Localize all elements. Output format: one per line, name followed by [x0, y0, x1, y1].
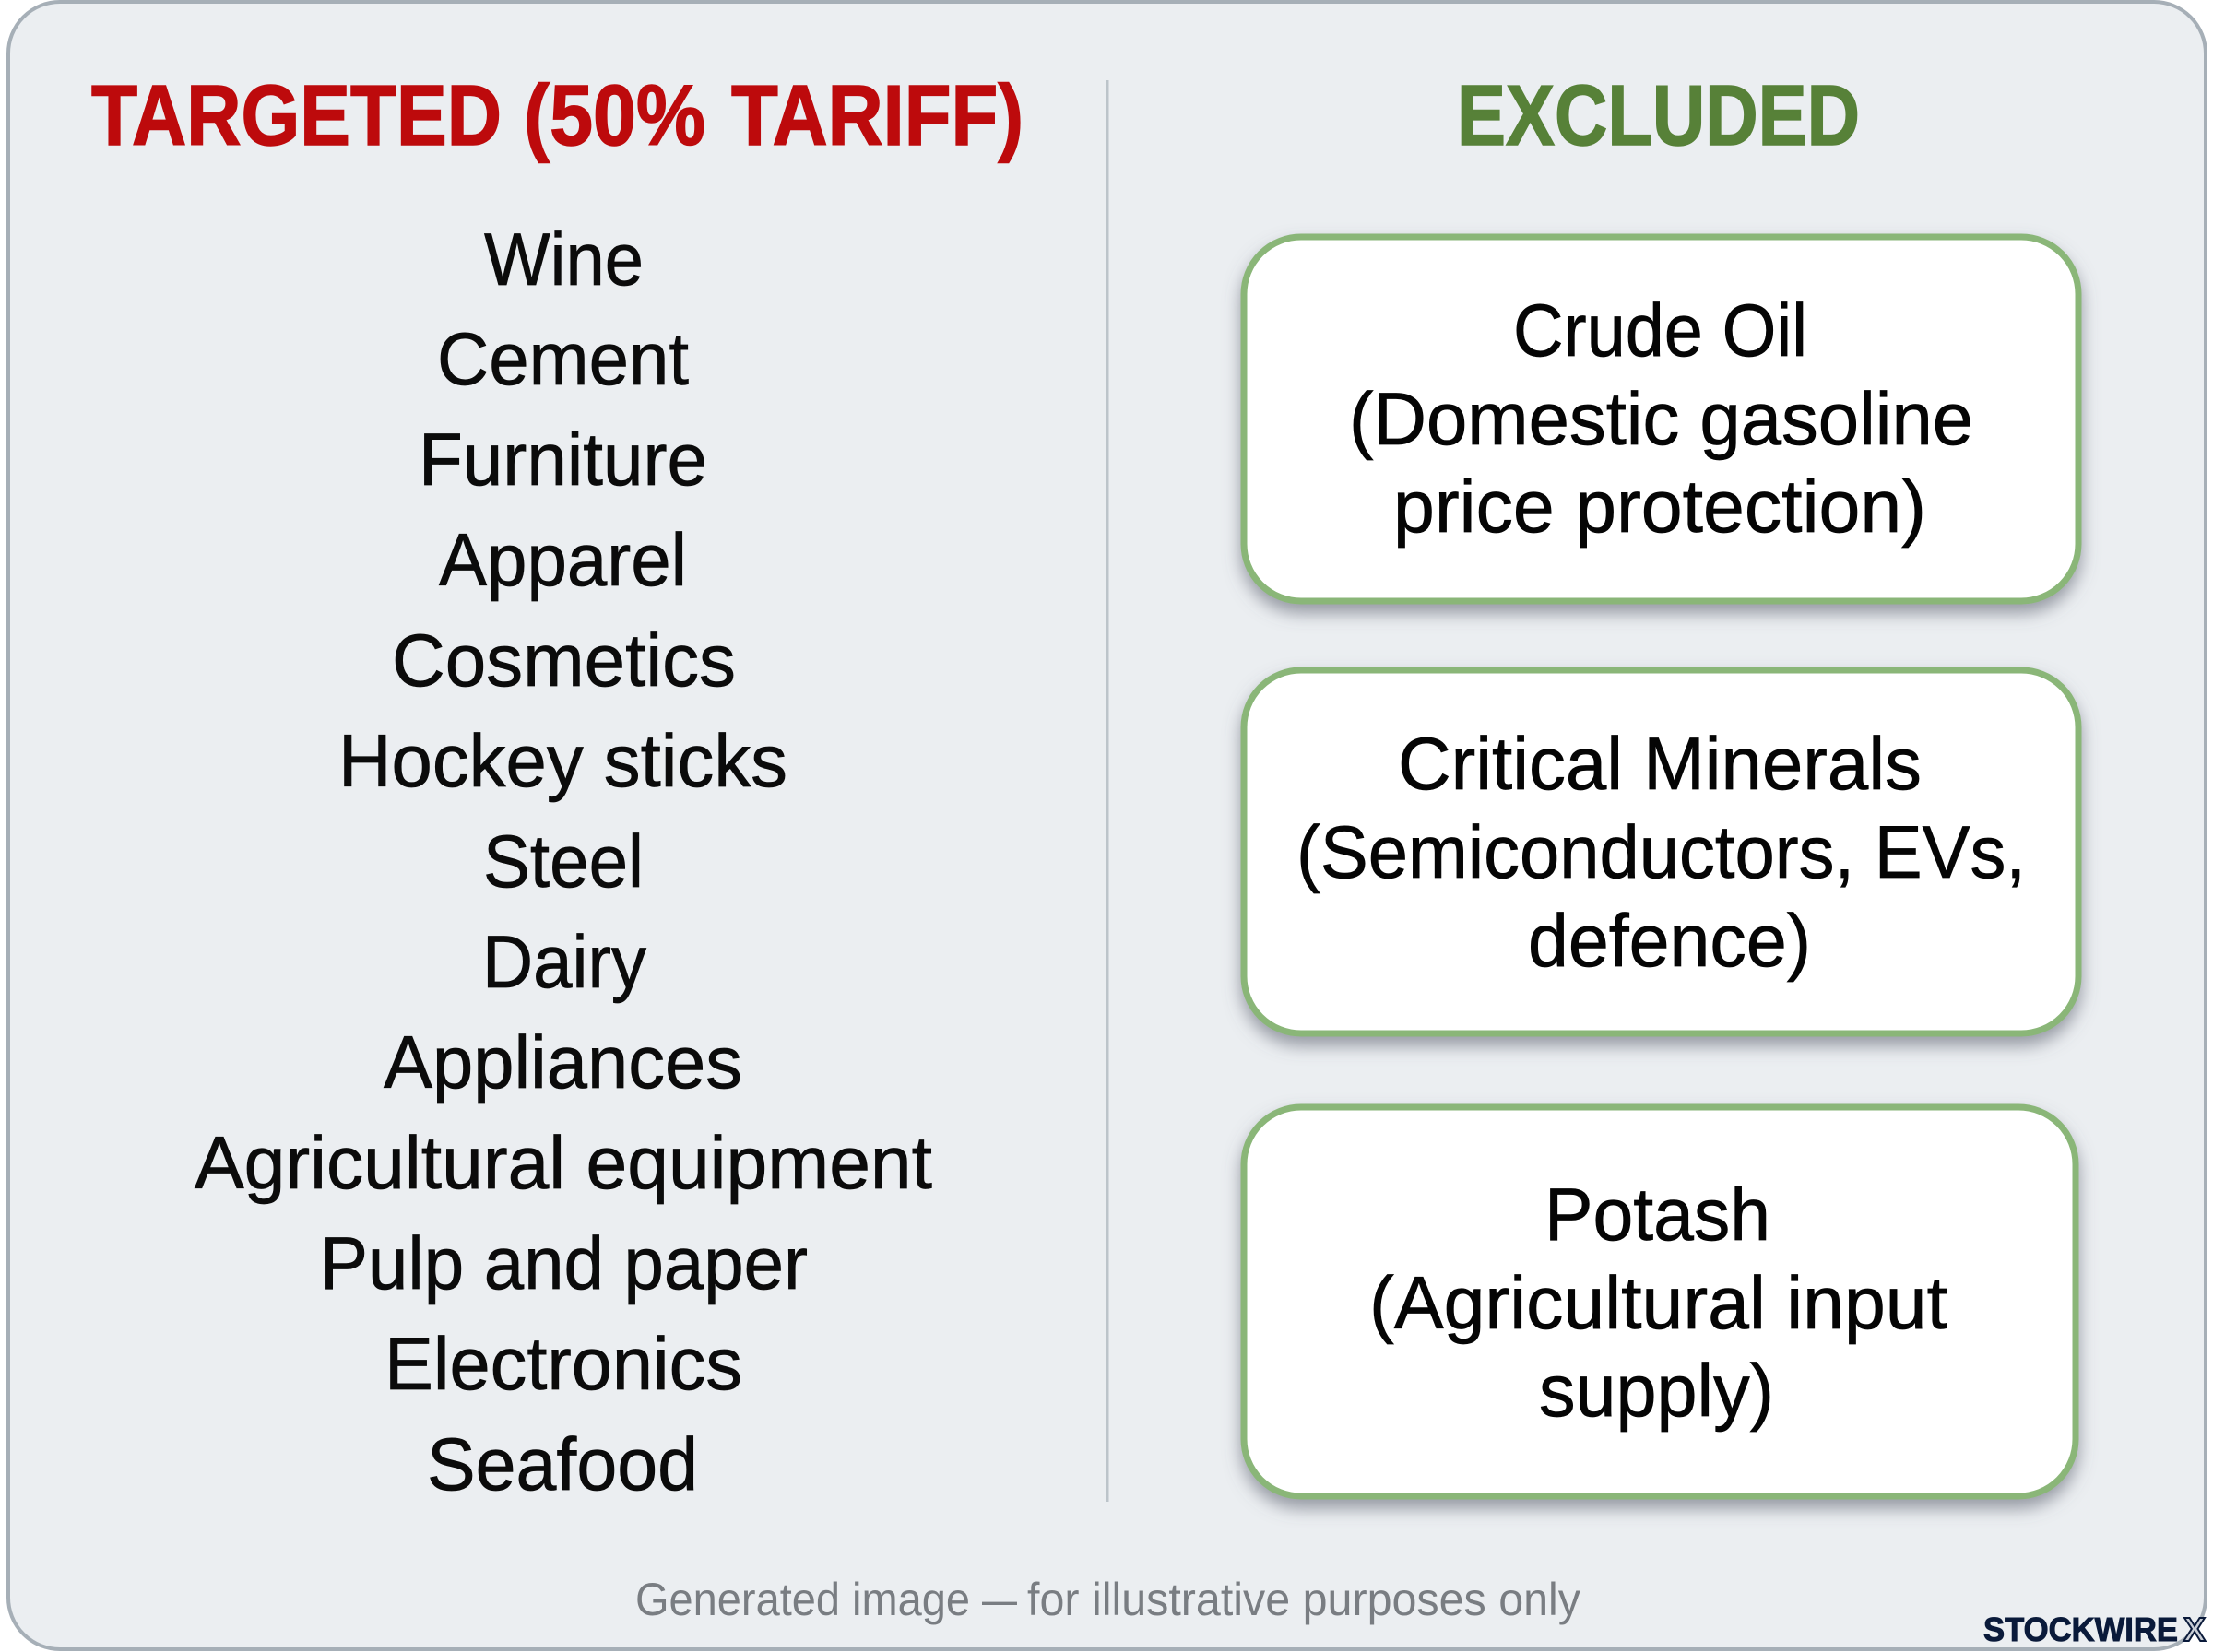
heading: targeted: TARIFF): [731, 67, 1024, 163]
card: critical minerals: Critical Minerals: [1398, 723, 1922, 806]
card: potash: (Agricultural input: [1369, 1262, 1947, 1345]
heading: targeted: (50%: [524, 67, 705, 163]
heading: excluded: EXCLUDED: [1457, 67, 1860, 163]
panel: targeted column: [91, 67, 1024, 1506]
footer note: for illustrative purposes only: [1027, 1574, 1580, 1625]
list: targeted goods: Seafood: [427, 1423, 698, 1506]
list: targeted goods: Cement: [437, 318, 689, 401]
card: critical minerals: [1244, 670, 2078, 1033]
watermark: stockwire x: STOCKWIRE: [1983, 1611, 2178, 1648]
watermark: stockwire x: X: [2183, 1611, 2206, 1648]
heading: targeted: [91, 67, 1024, 163]
list: targeted goods: Appliances: [384, 1021, 742, 1104]
list: targeted goods: Agricultural equipment: [195, 1122, 932, 1205]
heading: targeted: TARGETED: [91, 67, 502, 163]
list: targeted goods: Electronics: [385, 1323, 742, 1406]
card: potash: supply): [1539, 1350, 1774, 1433]
card: critical minerals: (Semiconductors, EVs,: [1296, 811, 2026, 894]
footer note: —: [982, 1574, 1017, 1625]
card: crude oil: [1244, 237, 2078, 601]
list: targeted goods: Apparel: [439, 519, 687, 602]
card: crude oil: (Domestic gasoline: [1349, 378, 1973, 461]
footer note: Generated image: [635, 1574, 970, 1625]
card: crude oil: price protection): [1393, 466, 1926, 549]
list: targeted goods: Steel: [483, 820, 644, 903]
list: targeted goods: Pulp and paper: [320, 1222, 808, 1305]
list: targeted goods: Dairy: [482, 921, 646, 1004]
list: targeted goods: Furniture: [419, 419, 707, 502]
list: targeted goods: Cosmetics: [392, 620, 736, 702]
card: potash: [1244, 1107, 2076, 1496]
list: targeted goods: [195, 218, 932, 1506]
list: targeted goods: Wine: [484, 218, 644, 301]
divider: [1106, 80, 1108, 1502]
panel: excluded column: [1244, 67, 2078, 1496]
footer note: [635, 1574, 1580, 1625]
card: potash: Potash: [1544, 1174, 1770, 1257]
card: critical minerals: defence): [1528, 900, 1811, 983]
list: targeted goods: Hockey sticks: [338, 720, 787, 803]
card: crude oil: Crude Oil: [1513, 289, 1807, 372]
